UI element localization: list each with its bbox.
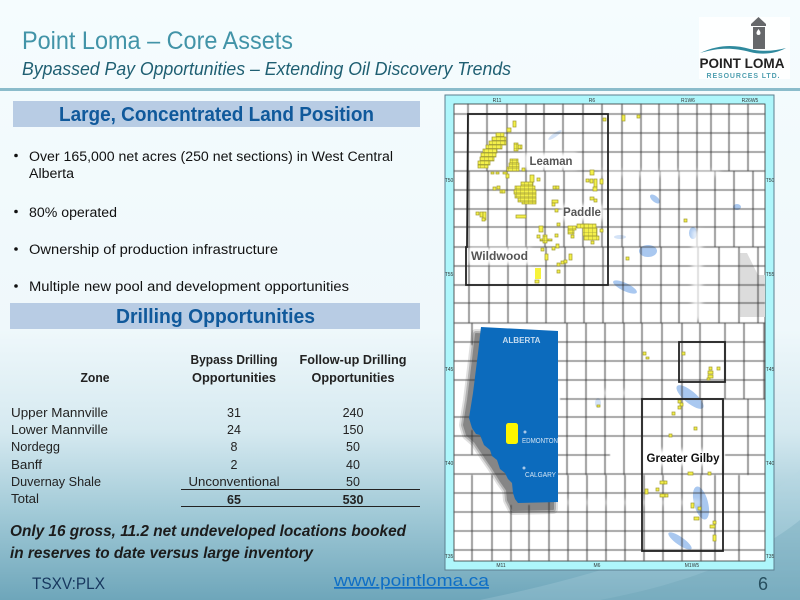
bullet list: Ownership of production infrastructure bbox=[29, 242, 278, 257]
map: range and township axis labels: M1W5 bbox=[685, 563, 699, 569]
footer: website link: www.pointloma.ca bbox=[333, 571, 490, 590]
heading: drilling opportunities: Drilling Opportunities bbox=[116, 306, 315, 328]
heading: land position bbox=[13, 101, 420, 127]
table zones bbox=[11, 406, 108, 506]
map label: Greater Gilby: Greater Gilby bbox=[646, 451, 720, 465]
map: range and township axis labels: T55 bbox=[445, 272, 454, 278]
header rule bbox=[0, 88, 800, 91]
title: Point Loma – Core Assets bbox=[22, 27, 293, 55]
table header: Opportunities bbox=[192, 371, 276, 385]
table zones: Nordegg bbox=[11, 440, 60, 454]
table zones: Total bbox=[11, 492, 39, 506]
bullet list bbox=[14, 149, 393, 294]
inset map: Alberta bbox=[464, 327, 558, 510]
map: range and township axis labels: T55 bbox=[766, 272, 775, 278]
table follow-up column: 50 bbox=[346, 440, 360, 454]
inset label: Edmonton bbox=[522, 430, 558, 445]
table header: Opportunities bbox=[312, 371, 395, 385]
map: well locations bbox=[476, 115, 720, 541]
table bypass column: 8 bbox=[231, 440, 238, 454]
map: core area outlines bbox=[466, 114, 725, 551]
bullet list: Multiple new pool and development opportunities bbox=[29, 279, 349, 294]
map: range and township axis labels: M11 bbox=[496, 563, 506, 569]
table zones: Upper Mannville bbox=[11, 406, 108, 420]
logo: Point Loma Resources bbox=[699, 17, 790, 80]
heading: land position: Large, Concentrated Land Position bbox=[59, 104, 374, 126]
heading: drilling opportunities bbox=[10, 303, 420, 329]
drilling table bbox=[11, 353, 420, 507]
map: range and township axis labels: T45 bbox=[766, 367, 775, 373]
table header bbox=[80, 353, 406, 385]
table zones: Banff bbox=[11, 458, 43, 472]
icon: wave bbox=[700, 46, 786, 54]
inset label: Calgary: CALGARY bbox=[525, 472, 556, 479]
table follow-up column: 50 bbox=[346, 475, 360, 489]
map: range and township axis labels: T35 bbox=[445, 554, 454, 560]
table header: Bypass Drilling bbox=[190, 353, 278, 367]
footer: ticker: TSXV:PLX bbox=[32, 574, 105, 593]
icon: lighthouse bbox=[751, 17, 766, 49]
inset label: Edmonton: EDMONTON bbox=[522, 438, 558, 445]
map: range and township axis labels: M6 bbox=[594, 563, 601, 569]
map: township grid bbox=[454, 104, 765, 561]
table header: Follow-up Drilling bbox=[300, 353, 406, 367]
table zones: Lower Mannville bbox=[11, 423, 108, 437]
reserves note bbox=[10, 523, 407, 562]
logo: Point Loma Resources: POINT LOMA bbox=[700, 55, 784, 71]
map: range and township axis labels: T50 bbox=[766, 178, 775, 184]
table follow-up column: 150 bbox=[343, 423, 363, 437]
map: range and township axis labels: R11 bbox=[493, 98, 502, 104]
inset label: Calgary bbox=[522, 466, 556, 479]
map: white label clearings bbox=[469, 153, 721, 505]
map: range and township axis labels: T45 bbox=[445, 367, 454, 373]
table follow-up column bbox=[343, 406, 363, 507]
table bypass column: 31 bbox=[227, 406, 241, 420]
reserves note: in reserves to date versus large inventory bbox=[10, 545, 314, 562]
bullet list: 80% operated bbox=[29, 205, 117, 220]
map: range and township axis labels: T35 bbox=[766, 554, 775, 560]
map: range and township axis labels: R26W5 bbox=[742, 98, 759, 104]
table follow-up column: 40 bbox=[346, 458, 360, 472]
map: range and township axis labels bbox=[445, 98, 775, 569]
bullet list: Over 165,000 net acres (250 net sections) in West Central bbox=[29, 149, 393, 164]
table follow-up column: 530 bbox=[343, 493, 363, 507]
reserves note: Only 16 gross, 11.2 net undeveloped locations booked bbox=[10, 523, 407, 540]
table bypass column: 65 bbox=[227, 493, 241, 507]
map: grey built-up area bbox=[740, 253, 765, 317]
inset marker: project area bbox=[506, 423, 518, 444]
subtitle: Bypassed Pay Opportunities – Extending Oil Discovery Trends bbox=[22, 59, 511, 79]
table bypass column: 24 bbox=[227, 423, 241, 437]
map: range and township axis labels: T40 bbox=[445, 461, 454, 467]
bullet list: Alberta bbox=[29, 166, 75, 181]
map panel bbox=[445, 95, 775, 570]
logo: Point Loma Resources: RESOURCES LTD. bbox=[706, 73, 780, 80]
map label: Paddle: Paddle bbox=[563, 205, 601, 219]
footer: page number: 6 bbox=[758, 574, 768, 594]
map label: Wildwood: Wildwood bbox=[471, 249, 528, 263]
table bypass column: Unconventional bbox=[188, 475, 280, 489]
map: range and township axis labels: R1W6 bbox=[681, 98, 695, 104]
map: range and township axis labels: R6 bbox=[589, 98, 595, 104]
map: range and township axis labels: T40 bbox=[766, 461, 775, 467]
map label: Leaman: Leaman bbox=[530, 154, 572, 168]
table bypass column bbox=[188, 406, 280, 507]
map: range and township axis labels: T50 bbox=[445, 178, 454, 184]
map: lakes bbox=[547, 129, 741, 552]
table follow-up column: 240 bbox=[343, 406, 363, 420]
table header: Zone bbox=[80, 371, 110, 385]
inset label: Alberta: ALBERTA bbox=[502, 336, 541, 345]
table zones: Duvernay Shale bbox=[11, 475, 101, 489]
table bypass column: 2 bbox=[231, 458, 238, 472]
